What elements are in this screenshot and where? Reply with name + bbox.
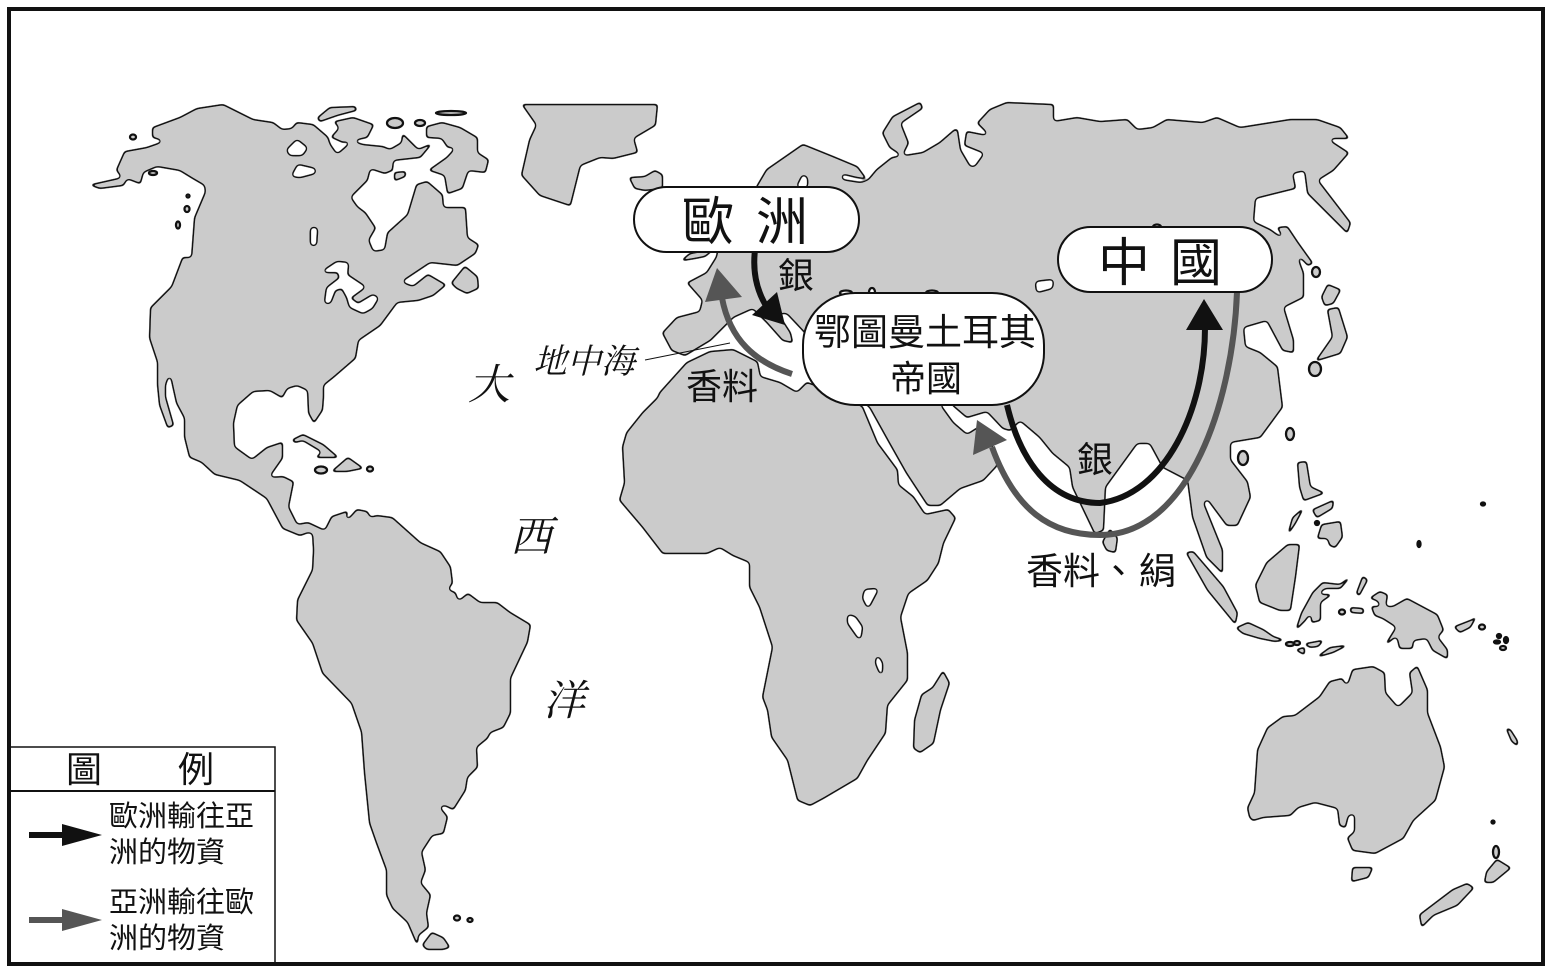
label: Europe: 歐洲 xyxy=(682,194,808,252)
legend xyxy=(9,747,275,964)
Caribbean islands xyxy=(293,435,362,471)
label: silver, Europe route: 銀 xyxy=(778,255,814,296)
label: Ottoman Empire: 鄂圖曼土耳其 xyxy=(814,312,1036,353)
arrow: spices from the Ottoman Empire to Europe xyxy=(705,268,792,374)
world map landmasses xyxy=(92,103,1517,949)
Arctic and Canadian islands xyxy=(318,107,488,293)
small round islands and inland seas xyxy=(130,111,1508,922)
Tierra del Fuego xyxy=(423,933,449,949)
landmass: Eurasia xyxy=(663,103,1350,572)
label: spices, Europe route: 香料 xyxy=(686,366,758,407)
label: Europe xyxy=(634,187,859,252)
label: China: 中國 xyxy=(1098,235,1222,293)
Pacific islands xyxy=(1455,618,1517,745)
label: Ottoman Empire xyxy=(803,293,1044,405)
arrow: silver from the Ottoman Empire to China xyxy=(1007,299,1223,503)
landmass: Iceland xyxy=(630,171,662,190)
legend title: 圖例 xyxy=(66,749,214,790)
landmass: Novaya Zemlya xyxy=(883,103,922,155)
label: China xyxy=(1058,227,1272,293)
legend item: Europe to Asia goods: 洲的物資 xyxy=(109,836,225,869)
arrow: spices and silk from China to the Ottoman Empire xyxy=(973,292,1237,535)
landmass: Greenland xyxy=(522,105,657,205)
label: Atlantic Ocean: 大 xyxy=(468,363,514,409)
label: silver, China route: 銀 xyxy=(1077,439,1113,480)
landmass: New Guinea xyxy=(1371,592,1447,658)
legend item: Asia to Europe goods: 亞洲輸往歐 xyxy=(109,886,254,919)
legend item: Asia to Europe goods xyxy=(29,886,254,955)
landmass: Madagascar xyxy=(914,672,949,752)
label: Ottoman Empire: 帝國 xyxy=(890,358,962,399)
landmass: New Zealand xyxy=(1420,860,1510,926)
landmass: the Americas xyxy=(92,105,530,943)
label: spices and silk: 香料、絹 xyxy=(1026,551,1176,592)
landmass: Australia xyxy=(1248,667,1444,853)
arrow: silver from Europe to the Ottoman Empire xyxy=(752,250,785,325)
label: Atlantic Ocean: 西 xyxy=(510,515,559,561)
legend item: Europe to Asia goods xyxy=(29,800,254,869)
landmass: Tasmania xyxy=(1352,868,1372,881)
legend item: Asia to Europe goods: 洲的物資 xyxy=(109,922,225,955)
label: Atlantic Ocean xyxy=(468,363,590,725)
Southeast Asian islands xyxy=(1187,462,1367,656)
legend item: Europe to Asia goods: 歐洲輸往亞 xyxy=(109,800,254,833)
label: Mediterranean Sea with leader line xyxy=(533,343,730,381)
landmass: Britain xyxy=(682,253,710,261)
label: Mediterranean Sea with leader line: 地中海 xyxy=(533,344,640,381)
landmass: Africa xyxy=(620,350,955,805)
East Asian islands xyxy=(1103,227,1347,552)
label: Atlantic Ocean: 洋 xyxy=(543,679,590,725)
